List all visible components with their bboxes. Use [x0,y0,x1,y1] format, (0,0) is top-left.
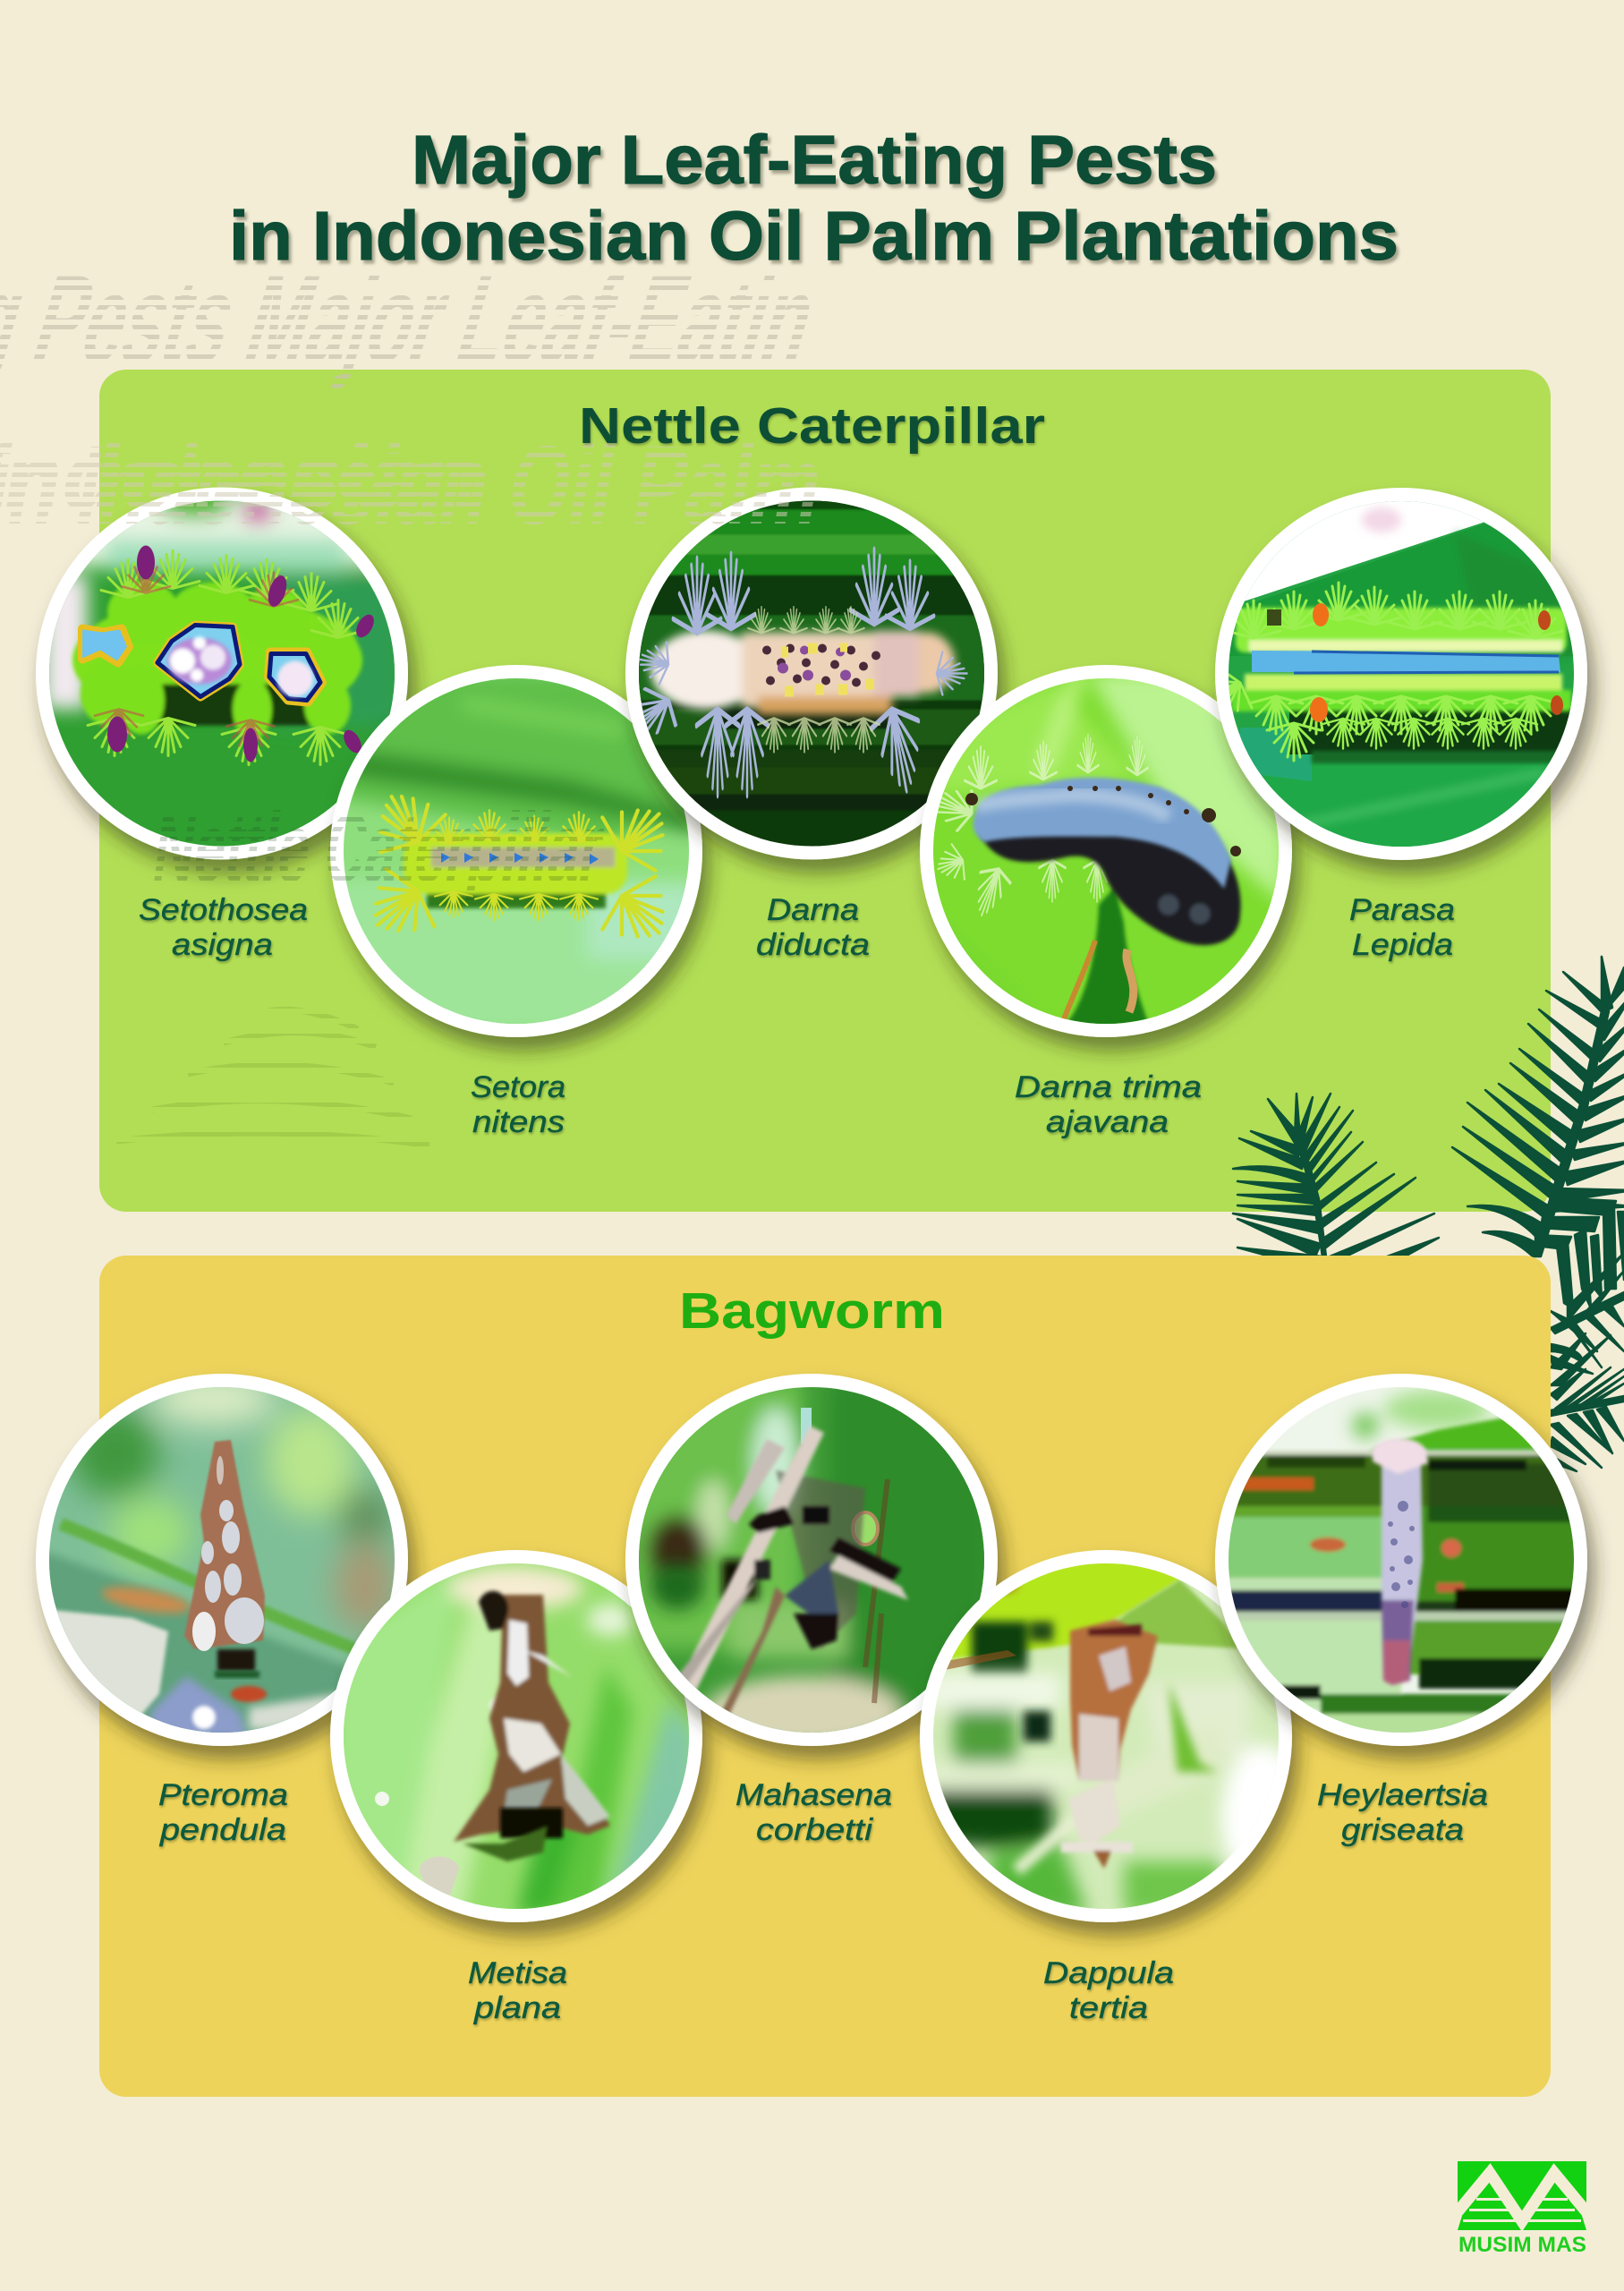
label: Darna diducta: Darna [767,893,859,927]
label: Parasa Lepida: Lepida [1352,928,1453,962]
label: Pteroma pendula: pendula [159,1813,286,1847]
photo circle: Darna trima ajavana [920,665,1292,1037]
panel: nettle caterpillar background [99,370,1551,1212]
label: Heylaertsia griseata: griseata [1341,1813,1464,1847]
label: Setothosea asigna [139,893,308,962]
label: Metisa plana [468,1956,567,2025]
photo circle: Dappula tertia [920,1550,1304,1922]
heading: nettle caterpillar: Nettle Caterpillar [579,397,1045,455]
label: Darna trima ajavana [1015,1070,1202,1139]
photo circle: Setora nitens [330,665,702,1037]
label: Darna diducta: diducta [756,928,870,962]
label: Heylaertsia griseata: Heylaertsia [1317,1778,1488,1812]
label: Dappula tertia [1043,1956,1174,2025]
label: Dappula tertia: tertia [1069,1991,1148,2025]
label: Setora nitens: nitens [472,1105,565,1139]
label: Darna trima ajavana: Darna trima [1015,1070,1202,1104]
artifact: ghost title line two [0,443,817,524]
labels: species names [139,893,1488,2025]
label: Pteroma pendula [158,1778,288,1847]
icon: lower right palm cluster [1535,1197,1624,1385]
label: Heylaertsia griseata [1317,1778,1488,1847]
label: Metisa plana: Metisa [468,1956,567,1990]
label: Setothosea asigna: asigna [172,928,273,962]
panel: bagworm background [99,1256,1551,2097]
photo circle: Pteroma pendula [36,1372,408,1746]
title: Major Leaf-Eating Pests [412,122,1217,199]
logo: Musim Mas [1451,2161,1593,2257]
photo circle: Darna diducta [609,487,998,859]
ghosted artifacts behind/over the layout [0,251,832,1146]
logo: Musim Mas: MUSIM MAS [1458,2233,1586,2257]
photo circle: Setothosea asigna [36,487,408,859]
icon: large palm frond [1452,957,1624,1256]
label: Mahasena corbetti: corbetti [756,1813,874,1847]
artifact: ghost title line two: in Indonesian Oil Palm [0,422,832,548]
label: Setora nitens: Setora [471,1070,565,1104]
photo circle: Heylaertsia griseata [1215,1374,1598,1746]
artifact: ghost dome [116,1009,429,1146]
photo circle: Metisa plana [330,1550,702,1922]
photo circle: Parasa lepida [1195,488,1587,860]
artifact: ghost nettle heading: Nettle Caterpillar [148,793,610,903]
label: Darna trima ajavana: ajavana [1046,1105,1169,1139]
title [229,122,1399,275]
label: Metisa plana: plana [473,1991,561,2025]
label: Pteroma pendula: Pteroma [158,1778,288,1812]
artifact: ghost title line one: Major Leaf-Eatin [232,251,831,389]
artifact: ghost title line one [0,276,809,388]
label: Setothosea asigna: Setothosea [139,893,308,927]
icon: small palm frond [1233,1094,1439,1256]
label: Mahasena corbetti: Mahasena [735,1778,892,1812]
label: Darna diducta [756,893,870,962]
label: Setora nitens [471,1070,565,1139]
photo circle: Mahasena corbetti [625,1374,998,1748]
label: Parasa Lepida: Parasa [1349,893,1455,927]
title: in Indonesian Oil Palm Plantations [229,198,1399,275]
label: Dappula tertia: Dappula [1043,1956,1174,1990]
label: Mahasena corbetti [735,1778,892,1847]
heading: bagworm: Bagworm [679,1282,945,1340]
label: Parasa Lepida [1349,893,1455,962]
icon: lowest palm frond [1551,1367,1624,1471]
icon: palm fronds [1233,957,1624,1471]
